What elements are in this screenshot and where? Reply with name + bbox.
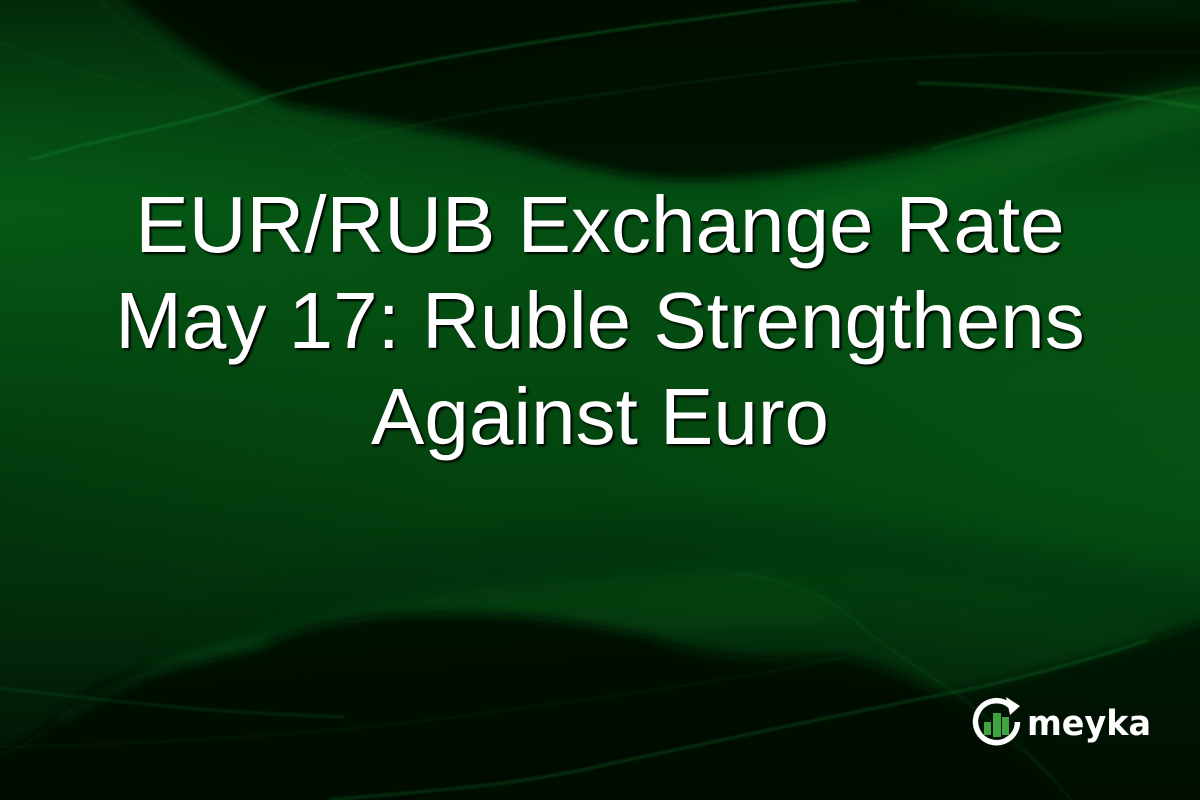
top dark shape: [110, 0, 1200, 180]
bottom dark hump: [0, 614, 1071, 800]
title: EUR/RUB Exchange Rate: [135, 180, 1065, 269]
bottom soft wave: [153, 514, 1200, 700]
title: Against Euro: [371, 372, 829, 461]
title: May 17: Ruble Strengthens: [115, 276, 1085, 365]
wordmark: meyka: [1027, 704, 1151, 744]
top lines: [30, 0, 857, 160]
bright band top right: [760, 80, 1200, 225]
bottom lines: [329, 640, 1147, 800]
title: [115, 180, 1085, 464]
icon: circular arrow with green bars: [976, 697, 1020, 743]
logo: meyka: [972, 697, 1151, 746]
